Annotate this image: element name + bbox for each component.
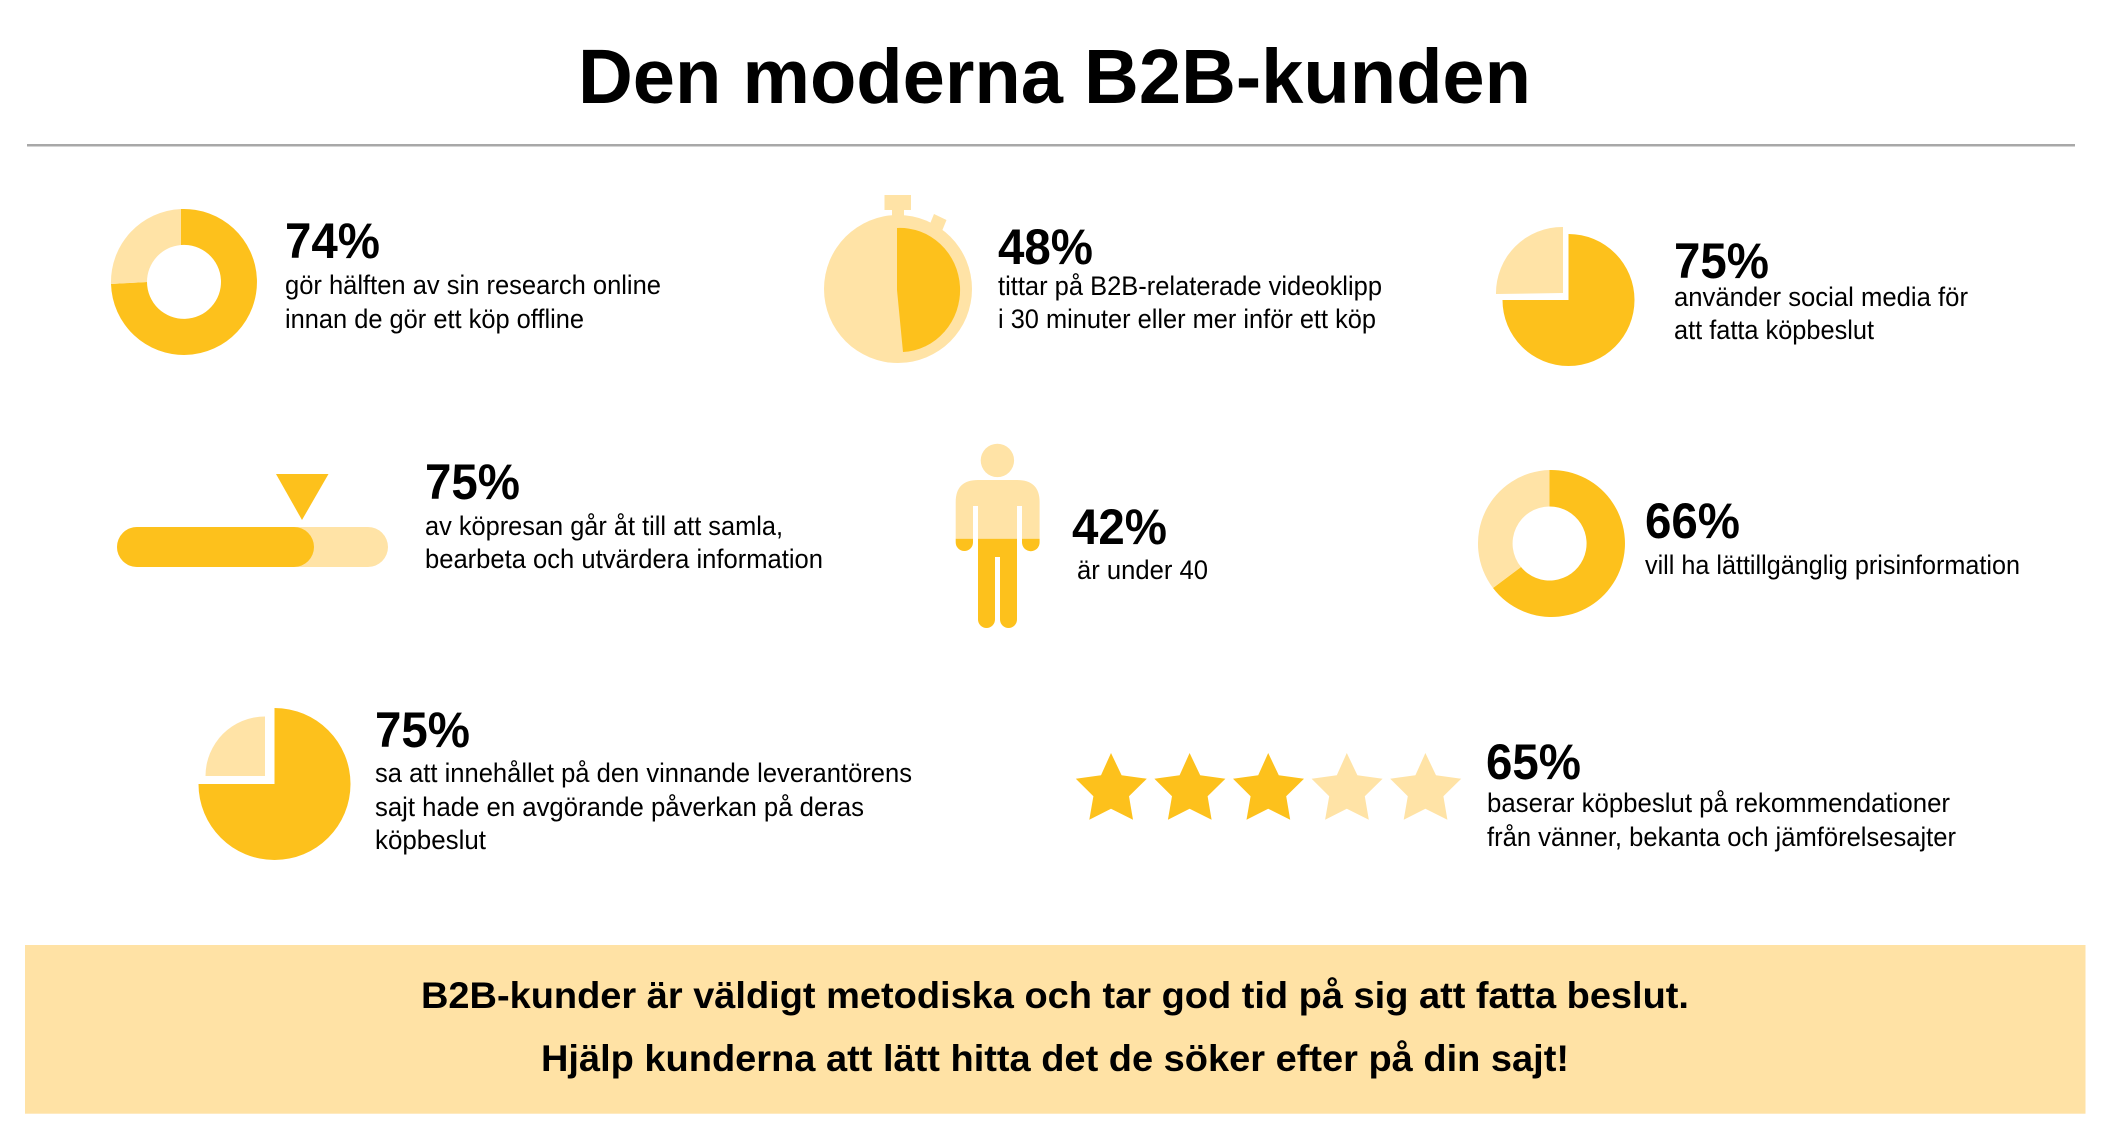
panel: 48% videoklipp [824, 195, 1382, 363]
text: 66% description: vill ha lättillgänglig prisinformation [1645, 550, 2020, 580]
text: 48% description: i 30 minuter eller mer inför ett köp [998, 304, 1376, 334]
text: innehåll description: sa att innehållet på den vinnande leverantörens [375, 758, 912, 788]
text: social media description: använder social media för [1674, 282, 1968, 312]
text: köpresan description [425, 511, 823, 574]
text: 74% description: gör hälften av sin research online [285, 270, 661, 300]
panel: 66% prisinformation [1478, 470, 2020, 617]
text: 65% description: baserar köpbeslut på rekommendationer [1487, 788, 1950, 818]
title: Den moderna B2B-kunden [578, 34, 1531, 120]
text: social media description [1674, 282, 1968, 345]
icon: donut 74% [111, 209, 257, 355]
text: innehåll description [375, 758, 912, 855]
panel: 65% rekommendationer [1076, 734, 1956, 852]
panel: 75% köpresan [117, 454, 823, 574]
text: banner line 1: B2B-kunder är väldigt metodiska och tar god tid på sig att fatta beslut. [421, 975, 1689, 1016]
icon: pie chart 75% large [198, 708, 350, 860]
icon: stopwatch [824, 195, 972, 363]
stat: 75% köpresan: 75% [425, 454, 520, 510]
stat: 75% innehåll: 75% [375, 702, 470, 758]
icon: donut 66% [1478, 470, 1625, 617]
text: köpresan description: av köpresan går åt till att samla, [425, 511, 783, 541]
panel: 75% social media [1496, 227, 1968, 366]
text: banner line 2: Hjälp kunderna att lätt hitta det de söker efter på din sajt! [541, 1038, 1569, 1079]
panel: 75% innehåll [198, 702, 912, 860]
stat: 75% social media: 75% [1674, 233, 1769, 289]
text: 48% description: tittar på B2B-relaterade videoklipp [998, 271, 1382, 301]
stat: 66%: 66% [1645, 493, 1740, 549]
text: 48% description [998, 271, 1382, 334]
text: innehåll description: köpbeslut [375, 825, 487, 855]
stat: 48%: 48% [998, 219, 1093, 275]
text: 65% description [1487, 788, 1956, 852]
stat: 42%: 42% [1072, 499, 1167, 555]
text: 65% description: från vänner, bekanta och jämförelsesajter [1487, 822, 1956, 852]
text: 74% description: innan de gör ett köp offline [285, 304, 584, 334]
panel: 42% under 40 [956, 444, 1208, 628]
icon: person figure [956, 444, 1040, 628]
stat: 74%: 74% [285, 213, 380, 269]
icon: five star rating [1076, 753, 1461, 820]
text: 42% description: är under 40 [1077, 555, 1208, 585]
text: innehåll description: sajt hade en avgörande påverkan på deras [375, 792, 864, 822]
text: 74% description [285, 270, 661, 334]
callout: conclusion banner [25, 945, 2086, 1114]
text: köpresan description: bearbeta och utvärdera information [425, 544, 823, 574]
icon: progress bar with marker [117, 474, 388, 567]
stat: 65%: 65% [1486, 734, 1581, 790]
icon: pie chart 75% [1496, 227, 1634, 366]
panel: 74% research online [111, 209, 661, 355]
text: social media description: att fatta köpbeslut [1674, 315, 1875, 345]
